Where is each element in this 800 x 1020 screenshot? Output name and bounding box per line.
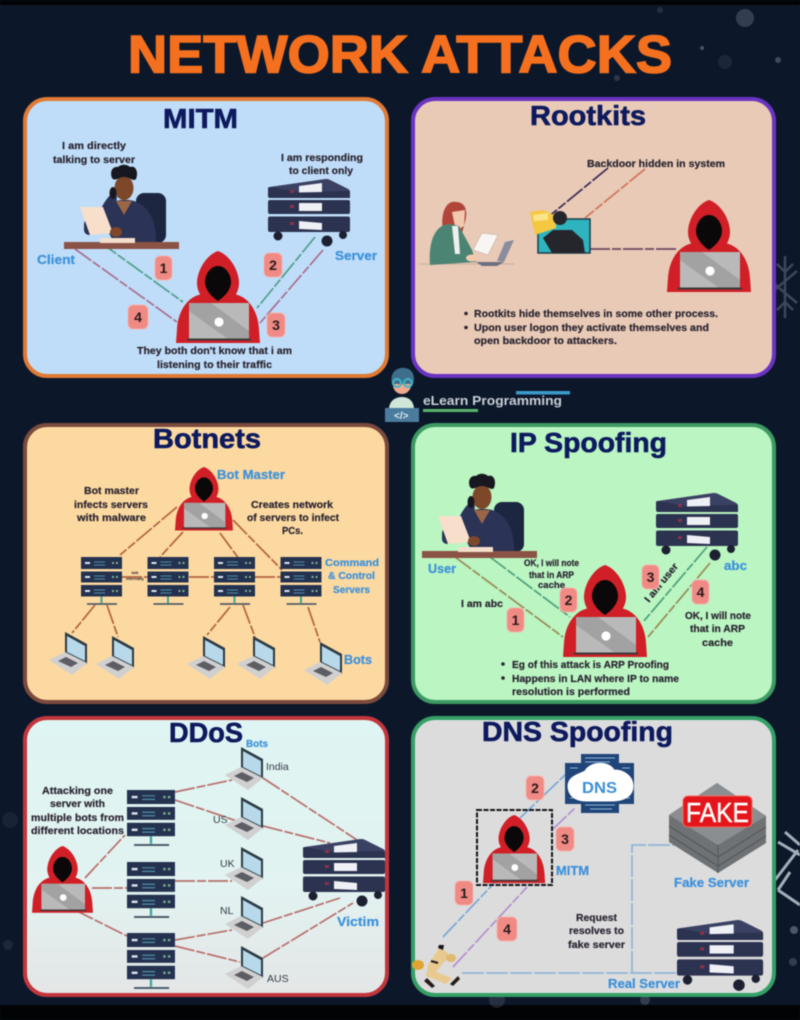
server caption: I am responding — [281, 153, 363, 164]
label: abc: abc — [724, 559, 747, 573]
label: User: User — [428, 562, 456, 576]
client caption: talking to server — [53, 155, 135, 166]
panel: MITM — [25, 99, 387, 376]
caption: note in ARP cache left: OK, I will note — [524, 558, 579, 568]
heading: IP Spoofing: IP Spoofing — [510, 427, 667, 458]
tiny label: talk internally — [126, 570, 145, 581]
bottom caption — [137, 346, 292, 371]
heading: Rootkits: Rootkits — [530, 100, 646, 131]
icon: bot master hacker — [175, 467, 233, 530]
caption: note in ARP cache right — [685, 611, 751, 649]
caption: creates network: PCs. — [282, 526, 303, 537]
label: command and control servers: Servers — [333, 584, 370, 596]
label: Client: Client — [37, 253, 76, 267]
server caption: to client only — [289, 166, 353, 177]
connection lines — [75, 237, 323, 323]
location labels: AUS — [267, 973, 289, 985]
location labels — [213, 761, 289, 985]
caption: note in ARP cache right: that in ARP — [690, 624, 745, 635]
caption: request resolves: Request — [576, 913, 618, 924]
caption: infects servers: with malware — [76, 513, 146, 524]
icon: DNS cloud: DNS — [582, 780, 617, 797]
label: Bot Master: Bot Master — [217, 468, 285, 482]
caption: note in ARP cache right: OK, I will note — [685, 611, 751, 622]
icon: hacker — [483, 815, 545, 883]
caption: note in ARP cache right: cache — [702, 638, 733, 649]
logo: eLearn Programming — [385, 368, 570, 422]
location labels: India — [266, 761, 289, 773]
step badge 1: 1 — [512, 612, 520, 628]
label: command and control servers: & Control — [328, 570, 375, 582]
label: Bots: Bots — [344, 653, 372, 667]
bullet list: Rootkits hide themselves in some other process. — [474, 309, 718, 320]
step badge 2: 2 — [565, 592, 573, 608]
bottom caption: listening to their traffic — [157, 360, 272, 371]
step badge 4 — [692, 580, 709, 604]
location labels: US — [213, 814, 228, 826]
step badge 4: 4 — [503, 921, 511, 937]
connection lines — [443, 775, 695, 973]
panel: IP Spoofing — [413, 425, 774, 702]
label: command and control servers: Command — [325, 557, 379, 569]
panel: Rootkits — [413, 99, 774, 376]
icon: fake server — [669, 783, 766, 873]
bullet list: Happens in LAN where IP to name — [512, 674, 679, 685]
server racks — [127, 790, 175, 988]
location labels: UK — [220, 858, 235, 870]
command and control servers — [81, 557, 322, 604]
icon: server — [268, 179, 350, 246]
logo: eLearn Programming: eLearn Programming — [423, 393, 562, 408]
connection lines — [455, 547, 710, 637]
caption: infects servers — [74, 486, 148, 524]
caption: request resolves: fake server — [568, 940, 625, 951]
bullet list: open backdoor to attackers. — [474, 336, 617, 347]
step badge 3 — [642, 565, 659, 589]
step badge 2: 2 — [531, 780, 539, 796]
client caption — [53, 141, 135, 166]
bullet list: Upon user logon they activate themselves and — [474, 323, 709, 334]
step badge 3: 3 — [647, 569, 655, 585]
heading: DNS Spoofing: DNS Spoofing — [482, 716, 673, 747]
step badge 2 — [560, 588, 577, 612]
bot laptops — [225, 747, 263, 989]
heading: Botnets: Botnets — [153, 423, 261, 454]
bottom caption: They both don't know that i am — [137, 346, 292, 357]
location labels: NL — [220, 905, 234, 917]
icon: DNS cloud — [565, 754, 634, 813]
icon: running victim — [412, 945, 460, 988]
step badge 1: 1 — [160, 260, 168, 276]
heading: MITM: MITM — [163, 103, 238, 134]
tiny label: talk internally: talk — [132, 570, 139, 575]
icon: fake server: FAKE — [686, 797, 749, 828]
step badge 1 — [455, 881, 473, 905]
caption: request resolves — [568, 913, 625, 951]
caption: note in ARP cache left: cache — [538, 580, 565, 590]
panel: DNS Spoofing — [412, 716, 774, 995]
icon: real server — [677, 920, 763, 991]
step badge 1 — [507, 608, 524, 632]
icon: victim server — [303, 839, 385, 906]
step badge 4 — [128, 305, 148, 329]
caption: I am user: I am user — [643, 561, 681, 605]
caption: attacking one server: multiple bots from — [31, 813, 124, 824]
step badge 4: 4 — [697, 584, 705, 600]
step badge 3: 3 — [561, 831, 569, 847]
step badge 1: 1 — [460, 885, 468, 901]
icon: client at desk — [64, 165, 179, 249]
icon: woman at laptop — [419, 202, 514, 266]
step badge 1 — [155, 256, 172, 280]
step badge 3 — [267, 313, 285, 337]
logo: eLearn Programming: </> — [394, 411, 409, 422]
icon: hacker — [667, 200, 751, 292]
caption: I am abc: I am abc — [461, 599, 503, 610]
title: NETWORK ATTACKS — [128, 26, 672, 84]
connection lines — [75, 778, 357, 962]
bullet list: Eg of this attack is ARP Proofing — [512, 660, 669, 671]
bullet list — [501, 660, 679, 698]
server caption — [281, 153, 363, 177]
bullet list: resolution is performed — [512, 687, 630, 698]
icon: hacker — [563, 565, 647, 657]
tiny label: talk internally: internally — [126, 576, 145, 581]
step badge 2 — [526, 776, 544, 800]
connection lines — [547, 168, 677, 249]
step badge 2 — [264, 253, 282, 277]
caption: note in ARP cache left — [524, 558, 579, 590]
label: Server: Server — [335, 249, 377, 263]
connection lines — [72, 507, 320, 642]
label: MITM: MITM — [556, 864, 589, 878]
client caption: I am directly — [62, 141, 126, 152]
step badge 4: 4 — [134, 309, 142, 325]
caption: attacking one server: Attacking one — [42, 786, 113, 797]
label: Fake Server: Fake Server — [674, 876, 749, 890]
bot laptops — [49, 632, 342, 685]
dashed box around MITM — [477, 810, 552, 885]
caption: infects servers: Bot master — [84, 486, 139, 497]
panel: Botnets — [25, 423, 387, 702]
icon: hacker — [32, 846, 93, 913]
caption: creates network: of servers to infect — [247, 513, 340, 524]
caption: attacking one server: server with — [50, 799, 105, 810]
label: Victim: Victim — [337, 915, 379, 929]
caption: attacking one server: different locations — [31, 826, 124, 837]
label: Real Server: Real Server — [608, 977, 680, 991]
caption: creates network — [247, 500, 340, 537]
label: Bots: Bots — [246, 739, 268, 750]
panel: DDoS — [25, 717, 387, 995]
caption: attacking one server — [31, 786, 124, 837]
step badge 3: 3 — [272, 317, 280, 333]
heading: DDoS: DDoS — [169, 717, 243, 748]
caption: note in ARP cache left: that in ARP — [529, 570, 574, 580]
icon: user at desk — [422, 474, 537, 558]
caption: creates network: Creates network — [251, 500, 333, 511]
caption: request resolves: resolves to — [569, 926, 624, 937]
caption: backdoor: Backdoor hidden in system — [587, 159, 725, 170]
label: command and control servers — [325, 557, 379, 596]
step badge 2: 2 — [269, 257, 277, 273]
icon: hacker — [176, 251, 260, 343]
icon: snowflake upper — [759, 256, 797, 318]
bullet list — [464, 309, 718, 347]
caption: infects servers: infects servers — [74, 500, 148, 511]
step badge 4 — [497, 917, 517, 941]
step badge 3 — [556, 827, 574, 851]
icon: server abc — [656, 493, 738, 560]
icon: thief in monitor — [530, 210, 590, 253]
